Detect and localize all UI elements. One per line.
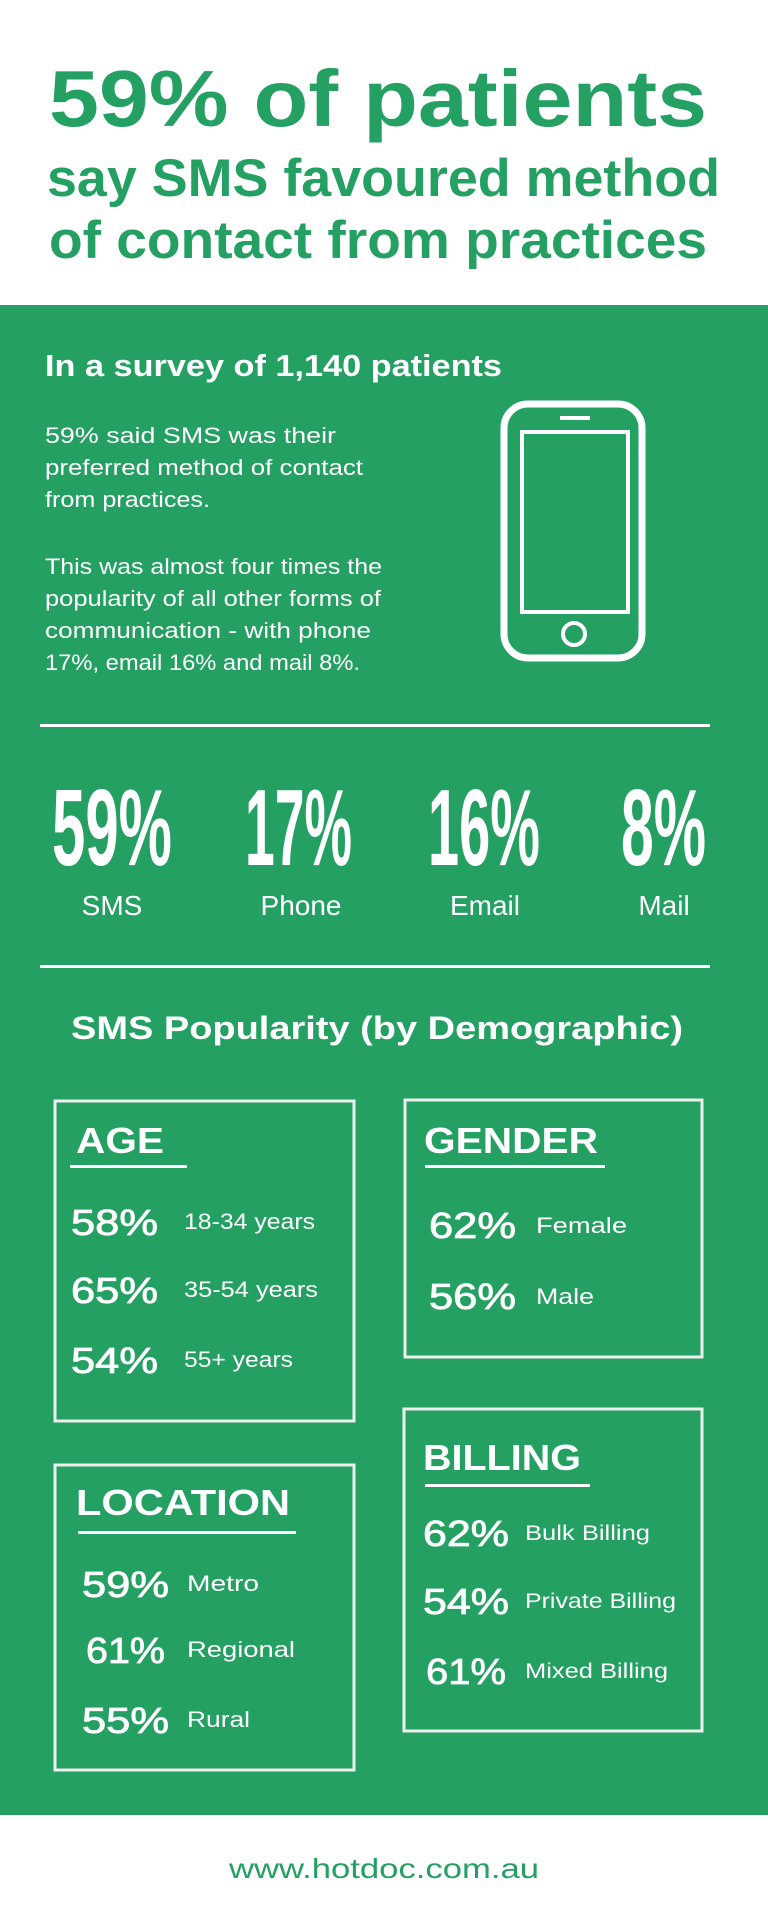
demographic heading: SMS Popularity (by Demographic) [71, 1010, 683, 1046]
survey text [45, 423, 382, 675]
panel: billing: 62% [423, 1513, 509, 1554]
panel: gender: Male [536, 1284, 594, 1309]
panel: age: 54% [71, 1340, 158, 1381]
panel: billing: Mixed Billing [525, 1660, 668, 1683]
stats row: 59% [52, 767, 172, 889]
footer url: www.hotdoc.com.au [228, 1853, 539, 1884]
title: of contact from practices [49, 211, 707, 270]
panel: location: Regional [187, 1637, 295, 1662]
survey text: communication - with phone [45, 618, 371, 643]
panel: gender: 56% [429, 1276, 516, 1317]
panel: billing: Bulk Billing [525, 1522, 650, 1545]
panel: billing: 54% [423, 1581, 509, 1622]
survey text: from practices. [45, 487, 210, 512]
survey text: This was almost four times the [45, 554, 382, 579]
panel: location: Metro [187, 1571, 259, 1596]
panel: billing [404, 1409, 702, 1731]
title [47, 54, 720, 270]
green panel [0, 305, 768, 1815]
stats row: Phone [261, 890, 341, 921]
stats row: Mail [638, 890, 690, 921]
stats row: SMS [82, 890, 142, 921]
title: say SMS favoured method [47, 149, 720, 208]
panel: location: Rural [187, 1707, 250, 1732]
panel: age: 65% [71, 1270, 158, 1311]
panel: age: AGE [76, 1120, 164, 1161]
panel: age: 35-54 years [184, 1277, 318, 1302]
survey text: popularity of all other forms of [45, 586, 382, 611]
stats row [52, 767, 706, 921]
stats row: 17% [245, 767, 352, 889]
panel: location: LOCATION [76, 1482, 290, 1523]
panel: gender: 62% [429, 1205, 516, 1246]
survey text: 59% said SMS was their [45, 423, 336, 448]
panel: location: 55% [82, 1700, 169, 1741]
panel: age [55, 1101, 354, 1421]
panel: location [55, 1465, 354, 1770]
survey text: preferred method of contact [45, 455, 363, 480]
title: 59% of patients [49, 54, 707, 143]
panel: billing: BILLING [423, 1437, 581, 1478]
survey heading: In a survey of 1,140 patients [45, 348, 502, 383]
panel: location: 61% [86, 1630, 165, 1671]
icon: smartphone [504, 404, 642, 658]
panel: age: 58% [71, 1202, 158, 1243]
panel: billing: Private Billing [525, 1590, 676, 1613]
survey text: 17%, email 16% and mail 8%. [45, 650, 360, 675]
panel: age: 18-34 years [184, 1209, 315, 1234]
panel: location: 59% [82, 1564, 169, 1605]
panel: age: 55+ years [184, 1347, 293, 1372]
stats row: Email [450, 890, 520, 921]
panel: gender [405, 1100, 702, 1357]
panel: billing: 61% [426, 1651, 506, 1692]
panel: gender: GENDER [424, 1120, 598, 1161]
panel: gender: Female [536, 1213, 627, 1238]
stats row: 16% [428, 767, 540, 889]
